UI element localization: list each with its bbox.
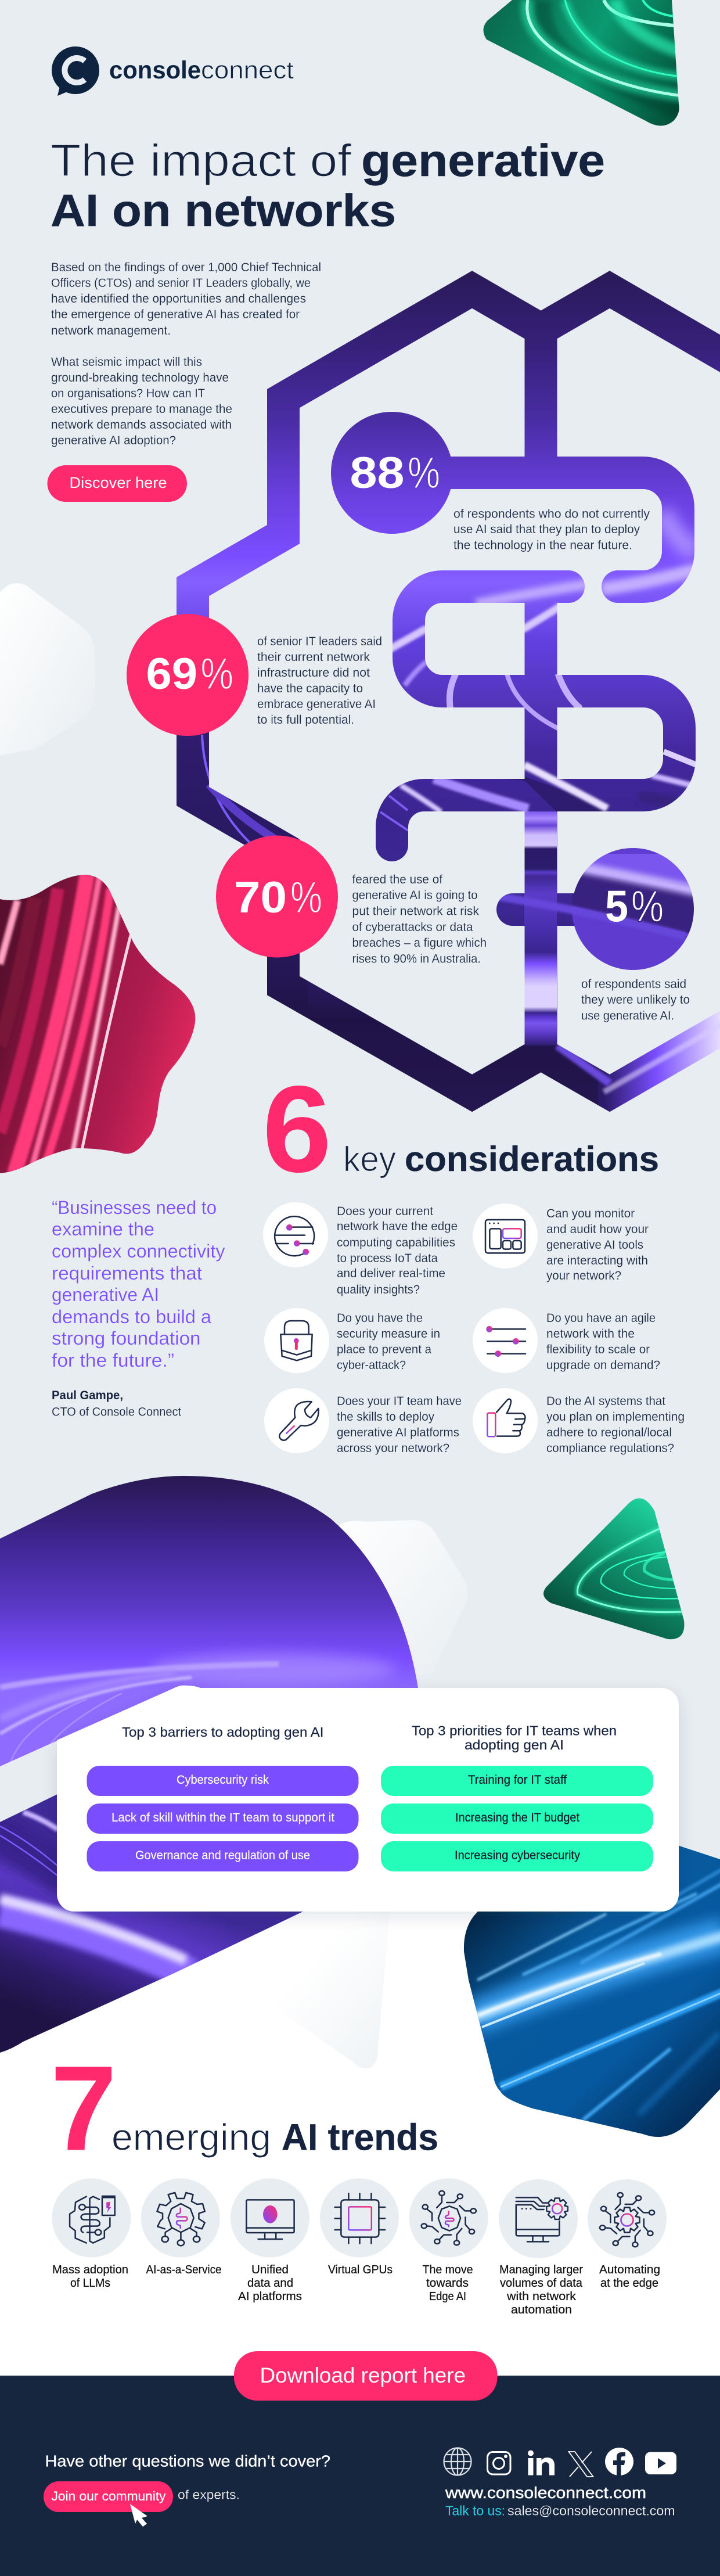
label: AI platforms: [238, 2290, 302, 2303]
logo: [52, 46, 294, 96]
trend: unified platforms: [231, 2178, 309, 2303]
pill: join our community: [44, 2481, 173, 2512]
decorative white hexagon left: [0, 583, 95, 755]
stat text: infrastructure did not: [257, 666, 370, 680]
label: at the edge: [600, 2277, 658, 2290]
consideration: monitoring: [473, 1203, 649, 1282]
icon: padlock: [264, 1308, 329, 1373]
intro text: Based on the findings of over 1,000 Chief Technical: [51, 261, 321, 274]
label: automation: [511, 2304, 572, 2316]
stat text: [257, 635, 382, 727]
icon: globe: [444, 2448, 471, 2476]
label: [423, 2264, 473, 2303]
priority: budget: Increasing the IT budget: [455, 1811, 579, 1824]
stat: 70%: 70: [234, 873, 287, 922]
5% circle artwork: [572, 848, 694, 970]
heading: 6 key considerations: key: [343, 1140, 396, 1179]
intro text: executives prepare to manage the: [51, 403, 232, 416]
card body: [57, 1686, 679, 1912]
priority: budget: [381, 1803, 653, 1834]
card: barriers and priorities: [57, 1686, 679, 1912]
intro text: ground-breaking technology have: [51, 371, 229, 385]
label: [499, 2264, 583, 2316]
text: and audit how your: [546, 1223, 649, 1236]
title: AI on networks: [51, 185, 396, 236]
icon: gear chip: [141, 2178, 220, 2257]
stat: 69%: [127, 614, 382, 736]
text: across your network?: [337, 1442, 449, 1455]
label: Automating: [599, 2264, 660, 2276]
label: Edge AI: [429, 2290, 466, 2303]
quote: demands to build a: [52, 1306, 211, 1327]
text: flexibility to scale or: [546, 1343, 650, 1356]
trend: LLMs: [52, 2178, 131, 2290]
text: upgrade on demand?: [546, 1359, 660, 1372]
stat text: breaches – a figure which: [352, 936, 487, 950]
stat: 88%: [350, 448, 650, 552]
stat text: [453, 508, 650, 552]
text: generative AI tools: [546, 1238, 643, 1252]
icon: thumbs up: [473, 1388, 538, 1453]
lower white background: [0, 1876, 720, 2381]
label: [52, 2264, 128, 2290]
text: Does your current: [337, 1205, 433, 1218]
text: of experts: of experts.: [178, 2487, 240, 2502]
barrier: lack of skill: [87, 1803, 359, 1834]
text: you plan on implementing: [546, 1410, 685, 1424]
consideration: compliance: [473, 1388, 685, 1455]
stat text: to its full potential.: [257, 713, 354, 727]
barrier: cybersecurity risk: Cybersecurity risk: [177, 1773, 269, 1787]
stat: 69%: %: [201, 649, 233, 699]
stat text: [352, 873, 487, 965]
title: [51, 135, 605, 236]
label: [599, 2264, 660, 2290]
stat text: of senior IT leaders said: [257, 635, 382, 648]
pill: join our community: Join our community: [51, 2489, 166, 2503]
footer call to action: Have other questions we didn’t cover?: [45, 2452, 330, 2470]
stat: 70%: [216, 835, 487, 965]
button: download report: [234, 2351, 497, 2401]
trend: edge AI: [409, 2178, 488, 2303]
footer contact: [445, 2484, 675, 2518]
quote attribution: Paul Gampe,: [52, 1389, 123, 1402]
button: download report: Download report here: [260, 2363, 466, 2387]
text: and deliver real-time: [337, 1267, 445, 1280]
network pipe graphic: [177, 271, 720, 1112]
stat text: have the capacity to: [257, 682, 363, 695]
consideration: security: [264, 1308, 440, 1373]
consideration: skills: [264, 1388, 462, 1455]
trend: automating at the edge: [588, 2179, 667, 2290]
label: AI-as-a-Service: [146, 2264, 222, 2276]
text: Can you monitor: [546, 1207, 635, 1220]
stat: 88%: %: [408, 448, 440, 498]
heading: 7 emerging AI trends: AI trends: [282, 2117, 438, 2158]
intro text: network demands associated with: [51, 418, 232, 432]
image: pink ribbons blob: [0, 871, 197, 1179]
quote: [52, 1197, 225, 1418]
intro text: What seismic impact will this: [51, 355, 202, 369]
icon: chip: [320, 2178, 399, 2257]
text: adhere to regional/local: [546, 1426, 672, 1439]
heading: 6 key considerations: 6: [262, 1060, 332, 1198]
heading: 7 emerging AI trends: [51, 2041, 438, 2176]
title: generative: [361, 135, 605, 186]
text: to process IoT data: [337, 1252, 438, 1265]
image: blue light streaks: [459, 1830, 720, 2143]
consideration: edge computing: [263, 1202, 458, 1296]
label: Virtual GPUs: [328, 2264, 393, 2276]
intro text: network management.: [51, 324, 171, 337]
icon: youtube: [645, 2452, 676, 2474]
text: compliance regulations?: [546, 1442, 674, 1455]
text: generative AI platforms: [337, 1426, 459, 1439]
text: Do you have the: [337, 1312, 423, 1325]
label: data and: [247, 2277, 293, 2290]
text: Do you have an agile: [546, 1312, 656, 1325]
barrier: lack of skill: Lack of skill within the IT team to support it: [111, 1811, 334, 1824]
title: The impact of: [51, 135, 351, 186]
heading: 6 key considerations: considerations: [405, 1140, 659, 1179]
stat: 70%: %: [290, 873, 322, 922]
icon: globe sliders: [263, 1202, 328, 1267]
icon: chip with nodes: [409, 2178, 488, 2257]
heading: 7 emerging AI trends: 7: [51, 2041, 117, 2176]
label: with network: [506, 2290, 577, 2303]
barrier: governance: [87, 1841, 359, 1871]
intro text: the emergence of generative AI has created for: [51, 308, 300, 321]
icon: sliders: [473, 1308, 538, 1373]
label: The move: [423, 2264, 473, 2276]
trend: AI-as-a-Service: [141, 2178, 222, 2276]
priorities heading: [412, 1723, 617, 1752]
icon: cursor: [130, 2504, 147, 2527]
stat text: of respondents who do not currently: [453, 508, 650, 520]
quote: examine the: [52, 1219, 154, 1240]
intro text: [51, 261, 321, 447]
label: of LLMs: [70, 2277, 110, 2290]
priority: cybersecurity: [381, 1841, 653, 1871]
icon: linkedin: [528, 2450, 555, 2476]
icon: instagram: [488, 2452, 510, 2474]
text: network with the: [546, 1327, 635, 1341]
priority: training: [381, 1766, 653, 1796]
stat text: rises to 90% in Australia.: [352, 953, 481, 965]
label: Mass adoption: [52, 2264, 128, 2276]
text: network have the edge: [337, 1220, 458, 1233]
stat: 69%: 69: [146, 649, 197, 699]
intro text: Officers (CTOs) and senior IT Leaders globally, we: [51, 276, 311, 290]
text: [337, 1205, 458, 1296]
stat text: the technology in the near future.: [453, 539, 632, 552]
barrier: cybersecurity risk: [87, 1766, 359, 1796]
text: cyber-attack?: [337, 1359, 406, 1372]
footer panel: [0, 2376, 720, 2576]
text: Does your IT team have: [337, 1395, 462, 1408]
text: [546, 1207, 649, 1282]
quote attribution: CTO of Console Connect: [52, 1406, 181, 1418]
barrier: governance: Governance and regulation of use: [135, 1849, 310, 1862]
social icons: [444, 2448, 676, 2477]
heading: 7 emerging AI trends: emerging: [111, 2117, 271, 2158]
image: purple swirl lower: [0, 1795, 303, 2053]
icon: X: [569, 2452, 593, 2477]
image: green swirl mid: [543, 1499, 684, 1639]
stat text: their current network: [257, 651, 370, 664]
stat text: use AI said that they plan to deploy: [453, 523, 640, 536]
consideration: agility: [473, 1308, 660, 1373]
heading: 6 key considerations: [262, 1060, 659, 1198]
label: towards: [426, 2277, 469, 2290]
label: Unified: [251, 2264, 289, 2276]
stat text: of respondents said: [581, 978, 686, 991]
image: purple swirl upper: [0, 1470, 424, 1772]
logo: connect: [201, 56, 294, 84]
button: discover here: [48, 465, 187, 502]
stat: 5%: 5: [605, 882, 628, 932]
stat text: [581, 978, 690, 1022]
text: [546, 1312, 660, 1372]
quote attribution: [52, 1389, 181, 1418]
quote: “Businesses need to: [52, 1197, 217, 1218]
quote: generative AI: [52, 1284, 159, 1305]
text: quality insights?: [337, 1283, 420, 1296]
stat text: they were unlikely to: [581, 993, 690, 1007]
barriers heading: Top 3 barriers to adopting gen AI: [122, 1724, 324, 1740]
footer call to action: [44, 2452, 330, 2527]
icon: brain circuit: [52, 2178, 131, 2257]
label: volumes of data: [500, 2277, 583, 2290]
text: your network?: [546, 1269, 621, 1282]
decorative white hexagon behind purple: [331, 1520, 468, 1684]
button: discover here: Discover here: [70, 474, 167, 491]
stat text: use generative AI.: [581, 1009, 674, 1022]
text: security measure in: [337, 1327, 440, 1341]
trend: virtual GPUs: [320, 2178, 399, 2276]
text: [337, 1395, 462, 1455]
trend: network automation: [499, 2179, 583, 2316]
image: green swirl top: [483, 0, 679, 125]
text: place to prevent a: [337, 1343, 431, 1356]
text: [546, 1395, 685, 1455]
stat text: generative AI is going to: [352, 889, 477, 902]
text: the skills to deploy: [337, 1410, 434, 1424]
text: [337, 1312, 440, 1372]
stat text: embrace generative AI: [257, 698, 376, 711]
priorities heading: Top 3 priorities for IT teams when: [412, 1723, 617, 1738]
stat: 5%: %: [631, 882, 664, 932]
stat text: feared the use of: [352, 873, 442, 886]
quote: complex connectivity: [52, 1241, 225, 1262]
icon: monitor with brain: [231, 2178, 309, 2257]
text: Do the AI systems that: [546, 1395, 665, 1408]
priority: cybersecurity: Increasing cybersecurity: [455, 1849, 580, 1862]
icon: gear with nodes: [588, 2179, 667, 2258]
stat text: of cyberattacks or data: [352, 921, 473, 934]
label: [238, 2264, 302, 2303]
intro text: have identified the opportunities and challenges: [51, 292, 306, 306]
decorative pale hexagon under card: [244, 1905, 390, 2068]
icon: facebook: [605, 2448, 633, 2476]
label: Managing larger: [499, 2264, 583, 2276]
wordmark: console: [109, 56, 201, 84]
priority: training: Training for IT staff: [468, 1773, 567, 1787]
text: computing capabilities: [337, 1236, 455, 1249]
footer contact: sales@consoleconnect.com: [507, 2503, 675, 2518]
footer contact: www.consoleconnect.com: [445, 2484, 646, 2502]
quote: for the future.”: [52, 1350, 174, 1371]
intro text: on organisations? How can IT: [51, 387, 205, 400]
intro text: generative AI adoption?: [51, 434, 176, 447]
stat text: put their network at risk: [352, 905, 479, 918]
priorities heading: adopting gen AI: [465, 1737, 564, 1752]
stat: 88%: 88: [350, 448, 404, 498]
quote: requirements that: [52, 1263, 202, 1284]
icon: speech bubble C: [52, 46, 99, 96]
stat: 5%: [581, 882, 690, 1022]
quote: strong foundation: [52, 1328, 201, 1349]
icon: wrench: [264, 1388, 329, 1453]
icon: dashboard: [473, 1203, 538, 1269]
text: are interacting with: [546, 1254, 648, 1267]
footer contact: Talk to us:: [445, 2503, 505, 2518]
icon: monitor with gear: [499, 2179, 578, 2258]
